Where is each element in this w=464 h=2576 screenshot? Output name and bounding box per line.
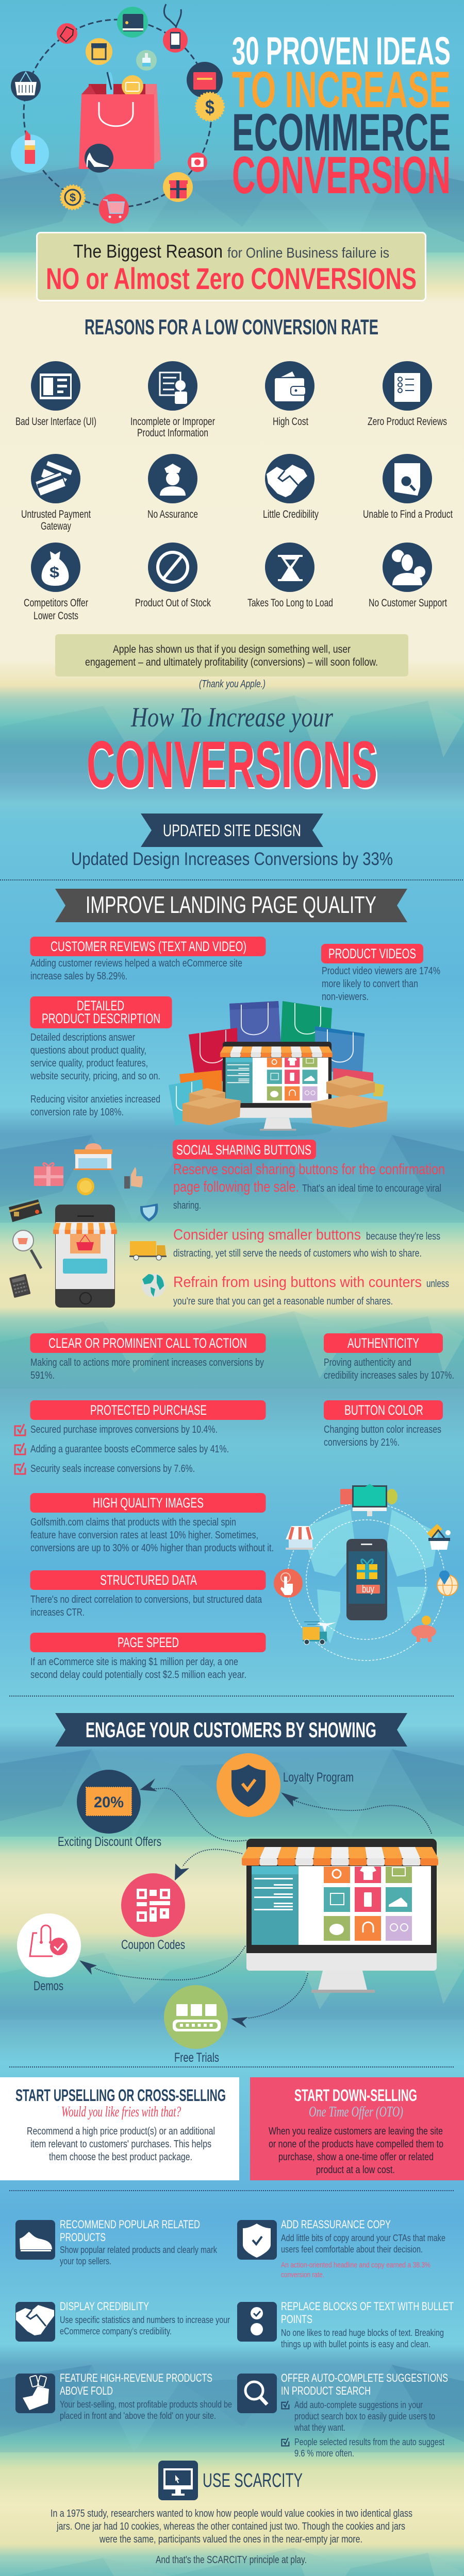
panel: page speed <box>30 1633 266 1681</box>
dashed circles <box>287 1503 445 1660</box>
icon: basket <box>427 1524 451 1550</box>
panel: high quality images: conversions are up to 30% or 40% higher than products without it. <box>30 1543 274 1554</box>
icon: discount offers: Exciting Discount Offers <box>58 1835 161 1849</box>
icon: phone and earphones <box>163 4 188 53</box>
text: updated design stat: Updated Design Increases Conversions by 33% <box>71 849 393 869</box>
panel: clear call to action <box>30 1333 266 1381</box>
panel: protected purchase: PROTECTED PURCHASE <box>90 1402 207 1418</box>
reason: too long to load <box>247 543 333 609</box>
icon: coin burst <box>61 185 85 209</box>
icon: demos: Demos <box>34 1979 63 1993</box>
icon: thumb up <box>124 1167 143 1189</box>
panel: down-selling: product at a low cost. <box>316 2164 395 2176</box>
arrows <box>79 1778 432 2028</box>
icon: truck and plane <box>303 1622 336 1645</box>
icon: demos <box>17 1913 81 1993</box>
icon: free trials <box>164 1985 228 2065</box>
tip: recommend popular related products: your top sellers. <box>60 2256 111 2266</box>
panel: page speed: PAGE SPEED <box>118 1635 179 1650</box>
diagram: engagement hub <box>17 1753 438 2065</box>
panel: product videos: more likely to convert than <box>322 978 418 990</box>
panel: social sharing buttons <box>173 1140 449 1307</box>
callout: apple quote: engagement – and ultimately profitability (conversions) – will soon follow. <box>85 656 378 668</box>
icon: coupon codes: Coupon Codes <box>121 1938 185 1952</box>
panel: upselling: item relevant to customers' purchases. This helps <box>30 2139 211 2150</box>
dashed orbit <box>24 20 211 207</box>
tip: display credibility: DISPLAY CREDIBILITY <box>60 2300 149 2313</box>
reason: bad user interface <box>15 361 96 428</box>
panel: authenticity: Proving authenticity and <box>324 1357 411 1368</box>
icon: coupon codes <box>121 1873 185 1952</box>
panel: customer reviews: CUSTOMER REVIEWS (TEXT AND VIDEO) <box>51 939 246 954</box>
icon: loyalty program <box>217 1753 354 1817</box>
tip: feature high-revenue products: ABOVE FOLD <box>60 2384 113 2397</box>
tip: auto-complete suggestions: IN PRODUCT SEARCH <box>281 2384 371 2397</box>
panel: detailed product description: questions about product quality, <box>30 1045 146 1056</box>
callout: biggest reason: for Online Business failure is <box>227 245 389 261</box>
icon: bank monitor <box>340 1484 397 1516</box>
tip: auto-complete suggestions: Add auto-complete suggestions in your <box>294 2400 423 2410</box>
icon: lipstick <box>11 130 49 173</box>
panel: protected purchase: Security seals increase conversions by 7.6%. <box>30 1463 195 1475</box>
panel: product videos <box>321 944 440 1003</box>
world map <box>307 1510 438 1643</box>
panel: high quality images <box>30 1493 274 1554</box>
panel: detailed product description <box>30 996 172 1118</box>
ribbon: updated site design: UPDATED SITE DESIGN <box>163 821 301 840</box>
icon: coin <box>77 1178 94 1195</box>
reason: competitors: $ <box>49 564 59 581</box>
icon: dollar burst <box>196 93 224 121</box>
illustration: bags, monitor and boxes <box>169 1001 388 1137</box>
tip: recommend popular related products: Show popular related products and clearly mark <box>60 2245 218 2255</box>
panel: product videos: non-viewers. <box>322 991 369 1003</box>
reason: competitors: Competitors Offer <box>24 597 88 609</box>
icon: magnifier <box>13 1230 41 1268</box>
tip: feature high-revenue products: Your best-selling, most profitable products should be <box>60 2399 232 2410</box>
icon: store <box>74 1143 113 1170</box>
icon: calculator <box>9 1274 31 1298</box>
tip: recommend popular related products: RECOMMEND POPULAR RELATED <box>60 2218 200 2231</box>
panel: structured data: There's no direct correlation to conversions, but structured data <box>30 1594 262 1605</box>
icon: coin burst: $ <box>70 191 76 204</box>
reason: zero reviews <box>368 361 447 428</box>
icon: store <box>286 1526 313 1550</box>
reason: incomplete info: Product Information <box>137 427 208 439</box>
callout: apple quote: Apple has shown us that if you design something well, user <box>113 643 351 655</box>
icon: basket <box>11 71 41 101</box>
ribbon: engage your customers <box>55 1713 407 1747</box>
icon: money <box>188 152 207 172</box>
tip: display credibility <box>15 2300 230 2342</box>
callout: biggest reason <box>37 233 426 301</box>
reason: untrusted payment <box>21 454 91 532</box>
ribbon: improve landing page quality <box>55 889 407 922</box>
panel: detailed product description: conversion rate by 108%. <box>30 1107 124 1118</box>
reason: untrusted payment: Gateway <box>41 520 71 532</box>
panel: detailed product description: PRODUCT DESCRIPTION <box>42 1011 160 1026</box>
panel: detailed product description: Reducing visitor anxieties increased <box>30 1094 160 1105</box>
panel: high quality images: Golfsmith.com claims that products with the special spin <box>30 1517 236 1528</box>
icon: cart <box>99 194 129 224</box>
callout: biggest reason: The Biggest Reason <box>73 241 223 262</box>
icon: phone buy screen <box>346 1539 387 1620</box>
icon: perfume <box>136 50 157 71</box>
monitor store <box>242 1839 438 1993</box>
icon: store <box>86 38 112 65</box>
reason: competitors: Lower Costs <box>34 610 78 622</box>
icon: discount offers: 20% <box>94 1794 124 1811</box>
panel: product videos: PRODUCT VIDEOS <box>328 946 416 961</box>
panel: social sharing buttons: Refrain from using buttons with counters <box>173 1274 422 1291</box>
ribbon: updated site design <box>141 814 323 847</box>
panel: detailed product description: Detailed descriptions answer <box>30 1032 135 1043</box>
reason: no assurance: No Assurance <box>147 509 198 520</box>
panel: clear call to action: Making call to actions more prominent increases conversions by <box>30 1357 264 1368</box>
reason: little credibility <box>263 454 319 520</box>
illustration: global mobile commerce <box>274 1484 458 1660</box>
icon: phone buy screen: buy <box>362 1584 374 1595</box>
icon: free trials: Free Trials <box>174 2050 219 2065</box>
tip: display credibility: Use specific statistics and numbers to increase your <box>60 2315 230 2325</box>
panel: customer reviews: increase sales by 58.29%. <box>30 971 127 982</box>
icon: credit card <box>9 1199 42 1222</box>
panel: clear call to action: CLEAR OR PROMINENT CALL TO ACTION <box>48 1335 247 1351</box>
shopping bag <box>79 72 161 169</box>
tip: recommend popular related products: PRODUCTS <box>60 2231 106 2244</box>
panel: structured data: increases CTR. <box>30 1607 85 1618</box>
panel: upselling: Would you like fries with that? <box>61 2104 181 2120</box>
panel: protected purchase: Secured purchase improves conversions by 10.4%. <box>30 1424 218 1435</box>
reason: incomplete info <box>130 361 215 439</box>
panel: social sharing buttons: Consider using smaller buttons <box>173 1227 361 1243</box>
icon: gift <box>163 172 193 202</box>
icon: discount offers <box>58 1770 161 1849</box>
panel: protected purchase <box>15 1400 266 1475</box>
icon: globe <box>142 1274 165 1297</box>
panel: social sharing buttons: sharing. <box>173 1200 201 1211</box>
illustration: mobile shop cluster <box>9 1143 167 1308</box>
panel: clear call to action: 591%. <box>30 1370 55 1381</box>
panel: down-selling <box>250 2077 464 2180</box>
reason: untrusted payment: Untrusted Payment <box>21 509 91 520</box>
panel: reasons grid <box>15 361 453 622</box>
title <box>232 29 451 205</box>
icon: dollar burst: $ <box>205 97 214 118</box>
icon: tap hand <box>274 1569 303 1598</box>
tip: recommend popular related products <box>15 2218 218 2266</box>
panel: social sharing buttons: page following the sale. <box>173 1179 299 1195</box>
tip: replace text with bullets: POINTS <box>281 2313 312 2326</box>
icon: piggy bank <box>411 1616 436 1642</box>
panel: high quality images: HIGH QUALITY IMAGES <box>93 1495 204 1511</box>
tip: auto-complete suggestions <box>237 2371 448 2459</box>
callout: apple quote <box>55 634 408 676</box>
icon: truck <box>129 1241 167 1260</box>
panel: upselling: Recommend a high price product(s) or an additional <box>27 2126 215 2137</box>
tip: replace text with bullets: things up with bullet points is easy and clean. <box>281 2339 430 2349</box>
reason: unable to find <box>363 454 453 520</box>
tip: add reassurance copy: ADD REASSURANCE COPY <box>281 2218 391 2231</box>
icon: loyalty program: Loyalty Program <box>283 1770 354 1785</box>
panel: structured data: STRUCTURED DATA <box>100 1572 197 1588</box>
tip: add reassurance copy: users feel comfortable about their decision. <box>281 2244 423 2255</box>
panel: button color <box>324 1400 443 1448</box>
section: use scarcity: And that's the SCARCITY principle at play. <box>156 2554 307 2566</box>
panel: detailed product description: DETAILED <box>77 998 124 1013</box>
reason: no assurance <box>147 454 198 520</box>
panel: social sharing buttons: unless <box>426 1278 449 1290</box>
panel: upselling: them choose the best product package. <box>49 2151 192 2163</box>
section: use scarcity: were the same, participants valued the ones in the near-empty jar more. <box>99 2534 362 2545</box>
panel: high quality images: feature have conversion rates at least 10% higher. Sometimes, <box>30 1530 258 1541</box>
hero illustration: shopping bag with orbit of icons <box>11 4 224 224</box>
panel: social sharing buttons: SOCIAL SHARING BUTTONS <box>176 1142 311 1158</box>
tip: add reassurance copy: An action-oriented headline and copy earned a 38.3% <box>281 2261 430 2269</box>
tip: add reassurance copy: conversion rate. <box>281 2270 324 2279</box>
icon: pin and globe <box>437 1570 458 1596</box>
panel: customer reviews: Adding customer reviews helped a watch eCommerce site <box>30 958 242 969</box>
section: use scarcity <box>51 2461 412 2566</box>
tip: replace text with bullets <box>237 2300 454 2349</box>
section: use scarcity: USE SCARCITY <box>203 2470 303 2492</box>
icon: red bag <box>57 23 77 44</box>
panel: detailed product description: website security, pricing, and so on. <box>30 1071 160 1082</box>
tip: feature high-revenue products: FEATURE HIGH-REVENUE PRODUCTS <box>60 2371 212 2384</box>
reason: incomplete info: Incomplete or Improper <box>130 416 215 428</box>
tip: feature high-revenue products <box>15 2371 232 2421</box>
panel: upselling: START UPSELLING OR CROSS-SELLING <box>15 2086 226 2105</box>
icon: wallet <box>117 7 148 38</box>
text: thank you apple: (Thank you Apple.) <box>199 679 266 690</box>
panel: customer reviews <box>30 937 266 982</box>
panel: button color: BUTTON COLOR <box>344 1402 423 1418</box>
tip: auto-complete suggestions: what they want. <box>294 2422 345 2433</box>
panel: upselling <box>0 2077 239 2180</box>
panel: protected purchase: Adding a guarantee boosts eCommerce sales by 41%. <box>30 1444 229 1455</box>
tip: add reassurance copy <box>237 2218 445 2279</box>
panel: social sharing buttons: you're sure that you can get a reasonable number of shares. <box>173 1296 393 1307</box>
panel: page speed: If an eCommerce site is making $1 million per day, a one <box>30 1656 238 1668</box>
reason: bad user interface: Bad User Interface (UI) <box>15 416 96 428</box>
phone with awning <box>53 1205 117 1308</box>
tip: feature high-revenue products: placed in front and 'above the fold' on your site. <box>60 2411 216 2421</box>
panel: down-selling: One Time Offer (OTO) <box>309 2104 403 2120</box>
reason: out of stock: Product Out of Stock <box>135 597 211 609</box>
panel: authenticity <box>324 1333 454 1381</box>
panel: authenticity: AUTHENTICITY <box>347 1335 419 1351</box>
reason: high cost <box>265 361 314 428</box>
tip: display credibility: eCommerce company's credibility. <box>60 2326 172 2336</box>
icon: drawer <box>187 62 223 98</box>
reason: high cost: High Cost <box>273 416 308 428</box>
icon: shield <box>140 1204 158 1222</box>
panel: button color: conversions by 21%. <box>324 1437 400 1448</box>
reason: too long to load: Takes Too Long to Load <box>247 597 333 609</box>
reason: out of stock <box>135 543 211 609</box>
tip: auto-complete suggestions: 9.6 % more often. <box>294 2448 354 2459</box>
reason: no support <box>369 543 447 609</box>
reason: little credibility: Little Credibility <box>263 509 319 520</box>
icon: high heel <box>85 144 113 173</box>
panel: social sharing buttons: because they're less <box>366 1231 440 1242</box>
heading: how to increase: How To Increase your <box>130 702 334 733</box>
panel: page speed: second delay could potentially cost $2.5 million each year. <box>30 1669 246 1681</box>
reason: competitors <box>24 543 88 622</box>
panel: detailed product description: service quality, product features, <box>30 1058 148 1069</box>
panel: structured data <box>30 1570 266 1618</box>
icon: gift <box>34 1163 63 1186</box>
